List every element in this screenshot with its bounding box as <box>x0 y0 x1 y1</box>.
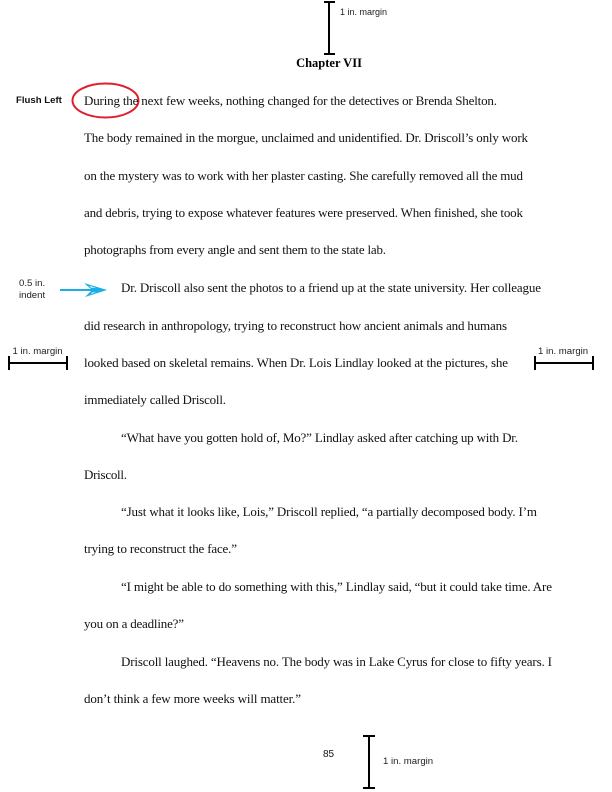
body text: you on a deadline?” <box>84 616 184 631</box>
body text: photographs from every angle and sent them to the state lab. <box>84 242 386 257</box>
page number: 85 <box>323 749 335 760</box>
arrow: indent <box>60 283 107 297</box>
body text: did research in anthropology, trying to reconstruct how ancient animals and humans <box>84 318 507 333</box>
body text: don’t think a few more weeks will matter.” <box>84 691 301 706</box>
body text: on the mystery was to work with her plaster casting. She carefully removed all the mud <box>84 168 524 183</box>
body text: During the next few weeks, nothing changed for the detectives or Brenda Shelton. <box>84 93 497 108</box>
bottom margin marker <box>363 736 433 788</box>
right margin marker: 1 in. margin <box>538 346 588 357</box>
red circle callout <box>72 84 138 118</box>
right margin marker <box>535 346 593 370</box>
body text: “Just what it looks like, Lois,” Driscoll replied, “a partially decomposed body. I’m <box>121 504 537 519</box>
body text: looked based on skeletal remains. When Dr. Lois Lindlay looked at the pictures, she <box>84 355 508 370</box>
body text: Driscoll. <box>84 467 127 482</box>
body text: “I might be able to do something with this,” Lindlay said, “but it could take time. Are <box>121 579 552 594</box>
body text: The body remained in the morgue, unclaimed and unidentified. Dr. Driscoll’s only work <box>84 130 528 145</box>
flush left label: Flush Left <box>16 95 63 106</box>
indent label: 0.5 in. <box>19 278 45 289</box>
left margin marker <box>9 346 67 370</box>
body text: trying to reconstruct the face.” <box>84 541 237 556</box>
top margin marker <box>324 2 387 54</box>
indent label: indent <box>19 290 45 301</box>
body text: immediately called Driscoll. <box>84 392 226 407</box>
top margin marker: 1 in. margin <box>340 7 387 17</box>
left margin marker: 1 in. margin <box>12 346 63 357</box>
body text <box>84 93 552 706</box>
bottom margin marker: 1 in. margin <box>383 756 433 767</box>
body text: and debris, trying to expose whatever features were preserved. When finished, she took <box>84 205 524 220</box>
body text: Dr. Driscoll also sent the photos to a friend up at the state university. Her colleague <box>121 280 541 295</box>
body text: Driscoll laughed. “Heavens no. The body was in Lake Cyrus for close to fifty years. I <box>121 654 552 669</box>
body text: “What have you gotten hold of, Mo?” Lindlay asked after catching up with Dr. <box>121 430 518 445</box>
indent label <box>19 278 45 301</box>
title: Chapter VII <box>296 56 362 70</box>
